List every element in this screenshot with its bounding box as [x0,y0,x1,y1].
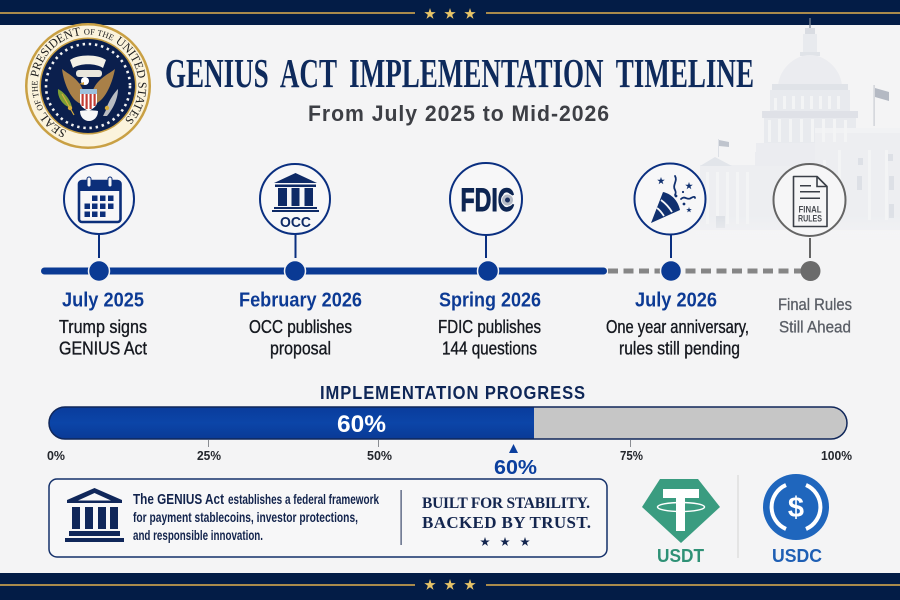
milestone: July 2025 [59,164,147,358]
label [778,295,852,336]
panel: about the act [49,479,607,557]
subtitle: From July 2025 to Mid-2026 [308,101,610,126]
progress scale: 0% [47,448,65,463]
description [606,317,749,358]
description: OCC publishes [249,317,352,337]
description [249,317,352,358]
progress scale [47,440,852,463]
act description: for payment stablecoins, investor protections, [133,510,358,525]
icon: OCC building: OCC [280,214,311,231]
act description [133,492,379,543]
description: One year anniversary, [606,317,749,337]
icon: final rules document [774,164,846,236]
description [59,317,147,358]
progress scale: 25% [197,448,221,463]
label: Still Ahead [779,318,851,336]
date: February 2026 [239,290,362,312]
icon: final rules document: RULES [798,214,822,224]
tagline: BACKED BY TRUST. [422,513,591,532]
description: rules still pending [619,338,740,358]
progress scale: 100% [821,448,852,463]
progress value: 60% [337,411,386,438]
description [438,317,541,358]
progress scale: 75% [620,448,643,463]
logo: USDT: USDT [657,546,704,566]
presidential seal [25,23,151,149]
description: Trump signs [59,317,147,337]
current progress marker [494,444,537,479]
icon: calendar [64,164,134,234]
seal eagle [58,56,118,121]
seal lettering: SEAL OF THE PRESIDENT OF THE UNITED STATES [30,27,146,137]
icon: federal building [65,488,124,542]
milestone: July 2026 [606,164,749,358]
date: Spring 2026 [439,290,541,312]
icon: final rules document: FINAL [798,204,822,214]
bottom banner [0,573,900,600]
description: 144 questions [442,338,537,358]
icon: FDIC logo [450,163,522,235]
date: July 2026 [635,290,717,312]
tagline [422,495,591,546]
act description: establishes a federal framework [228,492,379,507]
icon: FDIC logo: FDIC [460,182,514,218]
tagline: BUILT FOR STABILITY. [422,495,590,512]
milestone: Spring 2026 [438,163,541,358]
current progress marker: 60% [494,457,537,479]
milestone: Final Rules [774,164,852,336]
logo: USDC [763,474,829,566]
logo: USDC: USDC [772,546,822,566]
progress bar [49,407,847,439]
timeline track [41,268,802,274]
top banner [0,0,900,25]
label: Final Rules [778,295,852,314]
capitol building background [695,18,900,247]
logo: USDC: $ [788,492,804,524]
date: July 2025 [62,290,144,312]
description: proposal [270,338,331,358]
act description: and responsible innovation. [133,528,263,543]
description: FDIC publishes [438,317,541,337]
icon: OCC building [260,164,330,234]
milestone: February 2026 [239,164,362,358]
logo: USDT [642,479,720,566]
act description: The GENIUS Act [133,492,224,508]
icon: party popper [634,164,706,234]
progress scale: 50% [367,448,392,463]
description: GENIUS Act [59,338,147,358]
heading: implementation progress: IMPLEMENTATION PROGRESS [320,383,586,403]
